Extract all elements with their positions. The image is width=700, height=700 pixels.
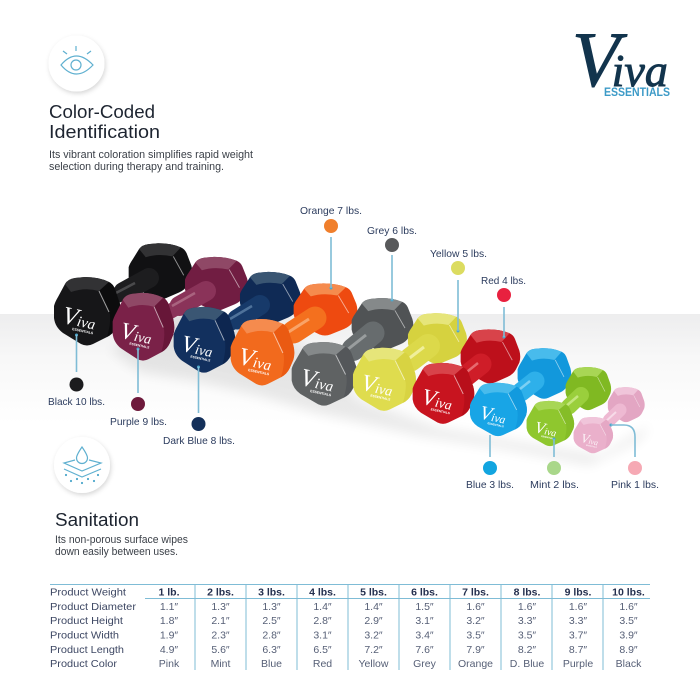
row: product weight: 3 lbs.: [258, 586, 285, 598]
row: product width: 3.5″: [518, 630, 536, 642]
logo: Viva Essentials: ESSENTIALS: [604, 85, 670, 99]
callout: pink 1 lb: [610, 424, 659, 491]
row: product height: 3.2″: [466, 615, 485, 627]
row: product color: Pink: [159, 658, 180, 670]
row: product weight: 2 lbs.: [207, 586, 234, 598]
row: product color: Product Color: [50, 658, 118, 670]
callout: black 10 lbs: Black 10 lbs.: [48, 396, 105, 408]
row: product length: 8.2″: [518, 644, 536, 656]
callout: dark blue 8 lbs: Dark Blue 8 lbs.: [163, 435, 235, 447]
panel: sanitation: [54, 437, 188, 558]
icon: eye: [48, 36, 104, 92]
dumbbell: black 10 lbs: Viva: [60, 302, 99, 335]
dumbbell: mint 2 lbs: Viva: [533, 418, 559, 440]
callout: yellow 5 lbs: [430, 248, 487, 332]
callout: red 4 lbs: [481, 275, 526, 338]
row: product width: 3.7″: [569, 630, 587, 642]
dumbbell: yellow 5 lbs: ESSENTIALS: [370, 394, 392, 402]
panel: color-coded identification: [48, 36, 253, 173]
dumbbell: mint 2 lbs: [527, 367, 611, 446]
dumbbell: black 10 lbs: [54, 243, 192, 346]
row: product height: [50, 615, 638, 627]
row: product diameter: 1.5″: [415, 601, 434, 613]
text: sanitation description: down easily between uses.: [55, 546, 178, 558]
callout: purple 9 lbs: [110, 348, 167, 428]
callout: purple 9 lbs: Purple 9 lbs.: [110, 416, 167, 428]
dumbbell: yellow 5 lbs: [353, 313, 467, 411]
row: product weight: Product Weight: [50, 586, 126, 598]
row: product color: [50, 658, 642, 670]
row: product width: 3.5″: [466, 630, 485, 642]
dumbbell: red 4 lbs: ESSENTIALS: [430, 407, 450, 415]
row: product diameter: [50, 601, 638, 613]
dumbbell: grey 6 lbs: ESSENTIALS: [310, 389, 332, 398]
row: product width: 3.9″: [619, 630, 638, 642]
row: product width: Product Width: [50, 630, 119, 642]
dumbbell: dark blue 8 lbs: Viva: [179, 331, 216, 363]
row: product height: 1.8″: [160, 615, 178, 627]
dumbbell: mint 2 lbs: ESSENTIALS: [541, 435, 556, 441]
logo: Viva Essentials: Viva: [572, 16, 668, 103]
dumbbell: blue 3 lbs: Viva: [478, 403, 508, 429]
row: product length: 7.2″: [364, 644, 383, 656]
row: product length: 6.5″: [313, 644, 332, 656]
row: product width: 3.4″: [415, 630, 434, 642]
callout: red 4 lbs: Red 4 lbs.: [481, 275, 526, 287]
row: product color: D. Blue: [510, 658, 544, 670]
dumbbell: orange 7 lbs: Viva: [236, 343, 275, 376]
callout: blue 3 lbs: Blue 3 lbs.: [466, 479, 514, 491]
row: product color: Purple: [563, 658, 593, 670]
dumbbell: pink 1 lb: ESSENTIALS: [586, 444, 598, 449]
row: product color: Mint: [211, 658, 230, 670]
callout: black 10 lbs: [48, 334, 105, 408]
text: sanitation description: Its non-porous surface wipes: [55, 534, 188, 546]
row: product weight: 10 lbs.: [612, 586, 645, 598]
row: product diameter: Product Diameter: [50, 601, 137, 613]
row: product weight: 9 lbs.: [565, 586, 591, 598]
callout: dark blue 8 lbs: [163, 366, 235, 447]
row: product width: [50, 630, 638, 642]
heading: color-coded identification: Identification: [49, 121, 160, 142]
row: product height: 3.5″: [619, 615, 638, 627]
row: product weight: 4 lbs.: [309, 586, 336, 598]
row: product weight: 5 lbs.: [360, 586, 387, 598]
row: product height: 2.8″: [313, 615, 332, 627]
row: product diameter: 1.3″: [262, 601, 281, 613]
row: product length: 7.6″: [415, 644, 434, 656]
row: product height: Product Height: [50, 615, 123, 627]
row: product height: 2.9″: [364, 615, 383, 627]
dumbbell: dark blue 8 lbs: ESSENTIALS: [190, 355, 212, 363]
row: product diameter: 1.6″: [466, 601, 485, 613]
row: product diameter: 1.6″: [569, 601, 587, 613]
dumbbell: grey 6 lbs: Viva: [298, 364, 337, 397]
row: product length: 8.9″: [619, 644, 638, 656]
row: product width: 2.3″: [211, 630, 230, 642]
row: product height: 3.3″: [569, 615, 587, 627]
callout: orange 7 lbs: [300, 205, 362, 290]
heading: color-coded identification: Color-Coded: [49, 101, 155, 122]
row: product height: 3.3″: [518, 615, 536, 627]
dumbbell: purple 9 lbs: Viva: [118, 318, 155, 350]
dumbbell: grey 6 lbs: [292, 298, 413, 406]
row: product length: 4.9″: [160, 644, 178, 656]
dumbbell: pink 1 lb: [574, 387, 645, 453]
floor background: [0, 314, 700, 424]
callout: mint 2 lbs: Mint 2 lbs.: [530, 479, 579, 491]
callout: grey 6 lbs: [367, 225, 417, 302]
row: product color: Red: [313, 658, 332, 670]
row: product color: Yellow: [359, 658, 389, 670]
row: product length: Product Length: [50, 644, 124, 656]
row: product width: 1.9″: [160, 630, 178, 642]
text: color-coded description: Its vibrant coloration simplifies rapid weight: [49, 149, 253, 161]
dumbbell: blue 3 lbs: ESSENTIALS: [487, 421, 504, 428]
row: product weight: 1 lb.: [158, 586, 180, 598]
row: product length: 5.6″: [211, 644, 230, 656]
callout: orange 7 lbs: Orange 7 lbs.: [300, 205, 362, 217]
row: product height: 3.1″: [415, 615, 434, 627]
row: product length: [50, 644, 638, 656]
row: product diameter: 1.3″: [211, 601, 230, 613]
row: product weight: 8 lbs.: [514, 586, 540, 598]
specification table: [50, 584, 650, 670]
text: color-coded description: selection during therapy and training.: [49, 161, 224, 173]
dumbbell: blue 3 lbs: [470, 348, 571, 436]
row: product diameter: 1.4″: [364, 601, 383, 613]
row: product color: Blue: [261, 658, 282, 670]
row: product width: 2.8″: [262, 630, 281, 642]
dumbbell: pink 1 lb: Viva: [580, 430, 600, 448]
row: product color: Grey: [413, 658, 437, 670]
callout: yellow 5 lbs: Yellow 5 lbs.: [430, 248, 487, 260]
dumbbell: black 10 lbs: ESSENTIALS: [72, 327, 94, 336]
row: product color: Black: [616, 658, 642, 670]
row: product diameter: 1.1″: [160, 601, 178, 613]
row: product diameter: 1.6″: [518, 601, 536, 613]
icon: water drop over layers: [54, 437, 110, 493]
row: product weight: 6 lbs.: [411, 586, 438, 598]
dumbbell: orange 7 lbs: ESSENTIALS: [248, 368, 270, 377]
dumbbell: red 4 lbs: Viva: [420, 384, 455, 415]
dumbbell: purple 9 lbs: ESSENTIALS: [129, 342, 151, 350]
row: product height: 2.5″: [262, 615, 281, 627]
row: product width: 3.2″: [364, 630, 383, 642]
callout: grey 6 lbs: Grey 6 lbs.: [367, 225, 417, 237]
row: product diameter: 1.4″: [313, 601, 332, 613]
heading: sanitation: Sanitation: [55, 509, 139, 530]
dumbbell: red 4 lbs: [413, 329, 520, 424]
floor shadows: [110, 310, 650, 465]
callout: blue 3 lbs: [466, 435, 514, 491]
row: product length: 6.3″: [262, 644, 281, 656]
row: product color: Orange: [458, 658, 493, 670]
dumbbell: yellow 5 lbs: Viva: [359, 370, 396, 402]
row: product height: 2.1″: [211, 615, 230, 627]
row: product width: 3.1″: [313, 630, 332, 642]
callout: pink 1 lb: Pink 1 lbs.: [611, 479, 659, 491]
row: product length: 7.9″: [466, 644, 485, 656]
dumbbell: purple 9 lbs: [113, 257, 248, 361]
row: product length: 8.7″: [569, 644, 587, 656]
row: product weight: 7 lbs.: [462, 586, 489, 598]
dumbbell: dark blue 8 lbs: [174, 272, 301, 373]
row: product diameter: 1.6″: [619, 601, 638, 613]
dumbbell row: [54, 243, 645, 453]
callout: mint 2 lbs: [530, 438, 579, 491]
row: product weight: [50, 586, 645, 598]
dumbbell: orange 7 lbs: [231, 283, 357, 385]
